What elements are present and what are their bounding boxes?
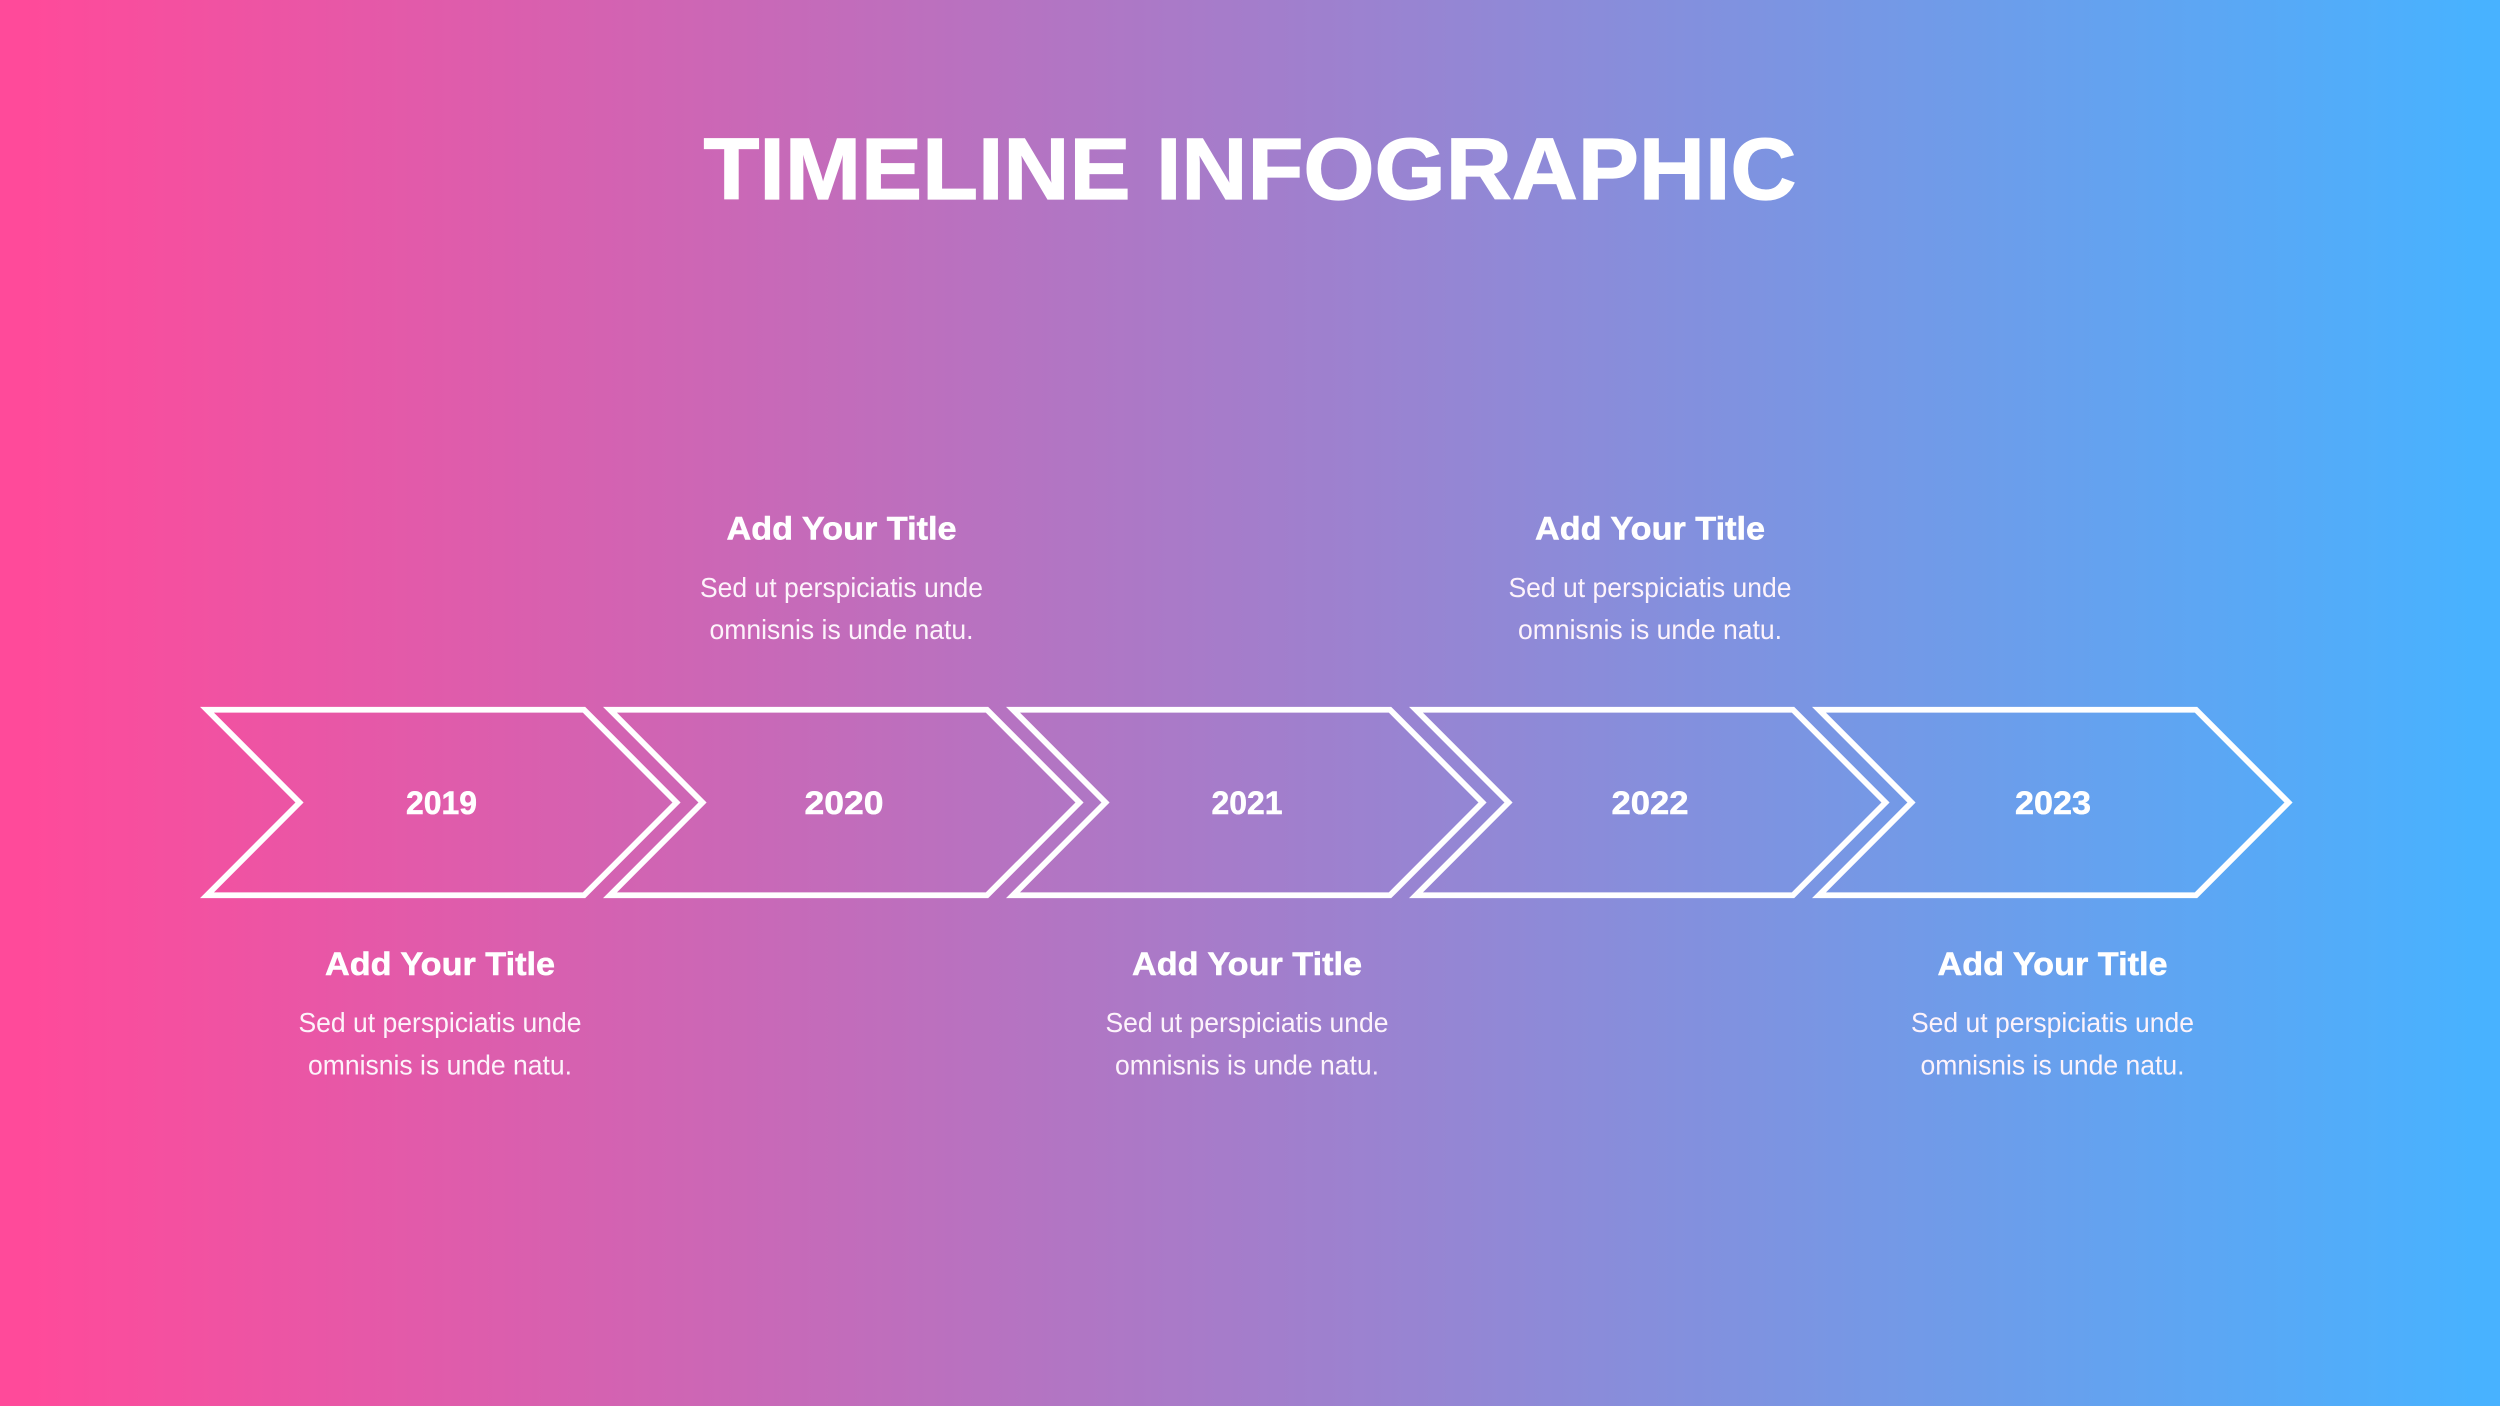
chevron: 2022 <box>1416 710 1886 895</box>
chevron: 2020 <box>610 710 1080 895</box>
text block: 2023 <box>1911 946 2194 1080</box>
text block: 2023: Sed ut perspiciatis unde <box>1911 1007 2194 1038</box>
chevron: 2022: 2022 <box>1612 785 1688 821</box>
text block: 2022 <box>1508 510 1792 645</box>
text block: 2019: Sed ut perspiciatis unde <box>298 1007 582 1038</box>
chevron: 2019: 2019 <box>406 785 477 821</box>
chevron: 2023 <box>1819 710 2288 895</box>
text block: 2019: Add Your Title <box>325 946 555 982</box>
text block: 2020 <box>700 510 983 645</box>
title: TIMELINE INFOGRAPHIC <box>704 121 1796 218</box>
text block: 2022: omnisnis is unde natu. <box>1518 614 1782 645</box>
text block: 2021: omnisnis is unde natu. <box>1115 1050 1379 1080</box>
chevron: 2019 <box>207 710 676 895</box>
text block: 2021: Sed ut perspiciatis unde <box>1106 1007 1388 1038</box>
text block: 2020: omnisnis is unde natu. <box>710 614 974 645</box>
text block: 2022: Add Your Title <box>1535 510 1765 546</box>
timeline chevrons <box>207 710 2288 895</box>
text block: 2023: Add Your Title <box>1938 946 2168 982</box>
chevron: 2020: 2020 <box>804 785 884 821</box>
text block: 2022: Sed ut perspiciatis unde <box>1508 572 1792 603</box>
chevron: 2021: 2021 <box>1212 785 1282 821</box>
text block: 2019: omnisnis is unde natu. <box>308 1050 572 1080</box>
chevron: 2021 <box>1013 710 1482 895</box>
text block: 2021: Add Your Title <box>1132 946 1362 982</box>
text block: 2021 <box>1106 946 1388 1080</box>
text block: 2020: Sed ut perspiciatis unde <box>700 572 983 603</box>
text block: 2020: Add Your Title <box>726 510 956 546</box>
chevron: 2023: 2023 <box>2015 785 2091 821</box>
text block: 2019 <box>298 946 582 1080</box>
text block: 2023: omnisnis is unde natu. <box>1920 1050 2184 1080</box>
